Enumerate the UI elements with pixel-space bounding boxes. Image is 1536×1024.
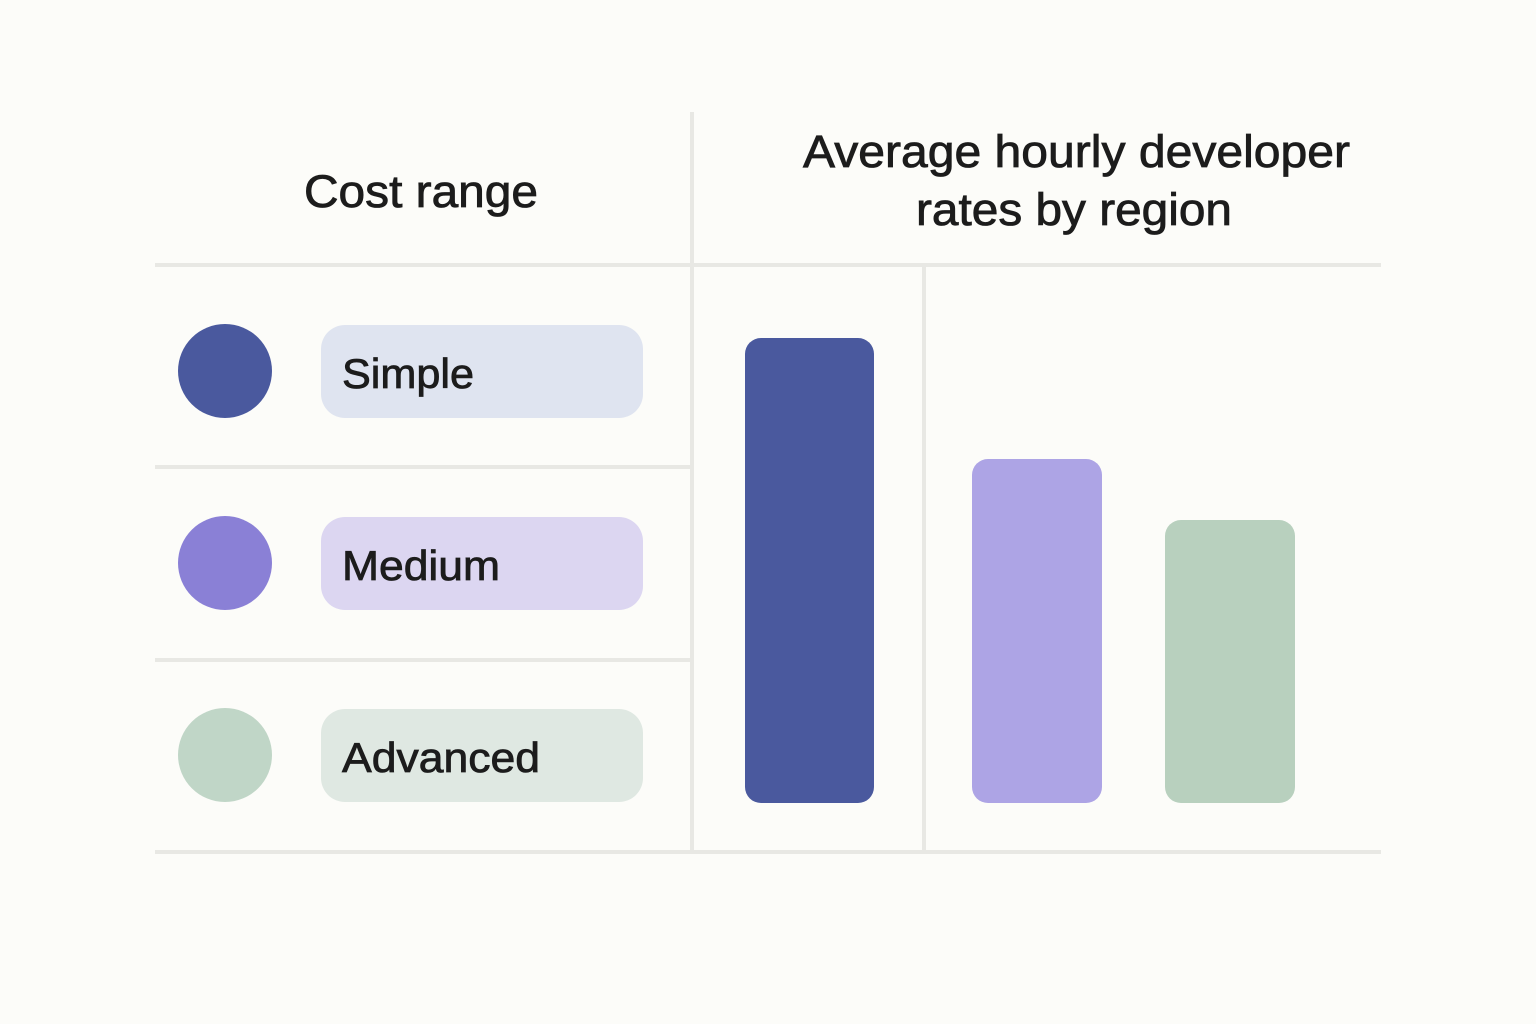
legend row: advanced: [178, 708, 643, 802]
pill: advanced: [321, 709, 643, 802]
pill: advanced: Advanced: [342, 734, 540, 781]
heading: average hourly developer rates by region: Average hourly developer: [803, 126, 1350, 177]
heading: cost range: Cost range: [304, 166, 538, 217]
pill: simple: Simple: [342, 350, 474, 397]
bar: advanced: [1165, 520, 1295, 803]
legend row: medium: [178, 516, 643, 610]
icon: medium circle: [178, 516, 272, 610]
bar chart: [745, 338, 1295, 803]
bar: simple: [745, 338, 874, 803]
heading: average hourly developer rates by region: rates by region: [916, 184, 1232, 235]
bar: medium: [972, 459, 1102, 803]
pill: medium: [321, 517, 643, 610]
icon: simple circle: [178, 324, 272, 418]
heading: average hourly developer rates by region: [803, 126, 1350, 235]
pill: medium: Medium: [342, 542, 500, 589]
icon: advanced circle: [178, 708, 272, 802]
pill: simple: [321, 325, 643, 418]
legend row: simple: [178, 324, 643, 418]
